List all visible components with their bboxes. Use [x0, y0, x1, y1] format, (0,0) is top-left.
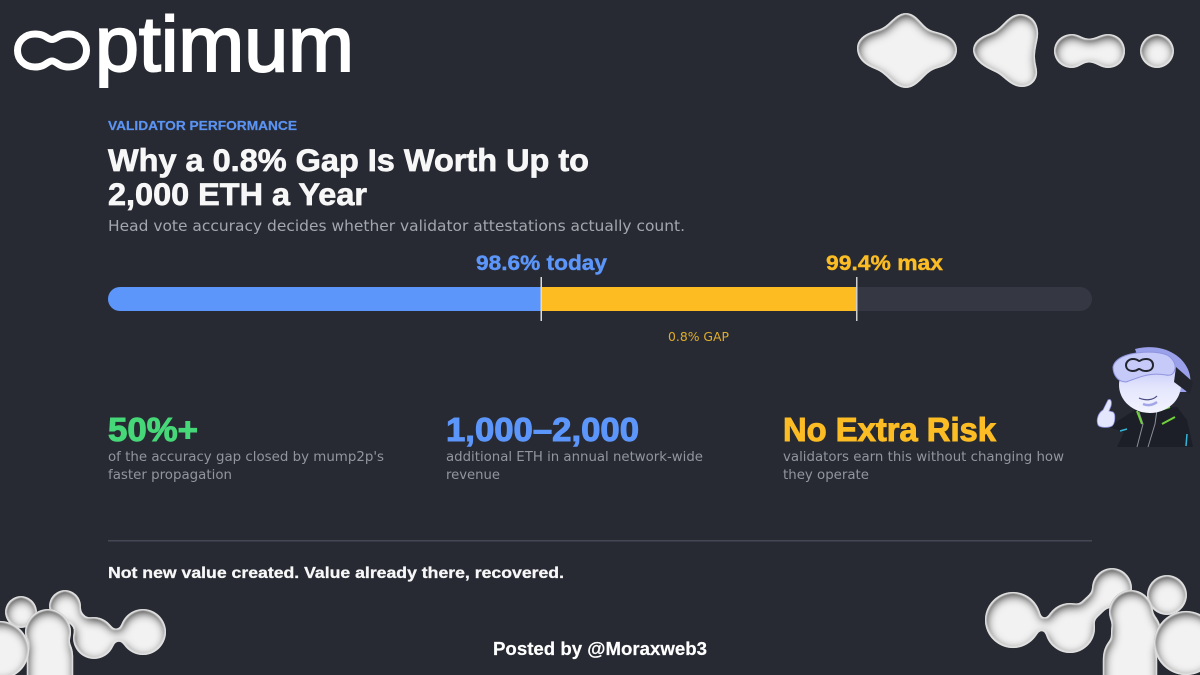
- stat: no extra risk: No Extra Risk: [783, 411, 997, 448]
- title: [108, 142, 589, 212]
- icon: mascot with VR headset and thumbs up: [1097, 347, 1193, 447]
- stat: no extra risk: validators earn this without changing how: [783, 450, 1064, 465]
- bar segment: gap: [541, 287, 857, 311]
- footer credit: Posted by @Moraxweb3: [493, 639, 707, 659]
- stat: 1,000-2,000 ETH: revenue: [446, 468, 500, 483]
- label: 98.6% today: 98.6% today: [476, 252, 607, 275]
- mascot back of head: [1135, 347, 1190, 392]
- logo: optimum: [18, 0, 354, 88]
- decoration: chrome blobs bottom right: [985, 568, 1200, 675]
- takeaway text: Not new value created. Value already there, recovered.: [108, 565, 564, 582]
- mascot thumbs up hand: [1097, 399, 1115, 427]
- mascot face: [1119, 357, 1181, 413]
- label: gap: 0.8% GAP: [668, 330, 729, 344]
- mascot headset strap: [1174, 367, 1193, 394]
- stat: 1,000-2,000 ETH: 1,000–2,000: [446, 411, 639, 448]
- divider: [108, 540, 1092, 542]
- stat: 50%+: 50%+: [108, 411, 198, 448]
- subtitle: Head vote accuracy decides whether validator attestations actually count.: [108, 217, 685, 235]
- stat: 50%+: [108, 411, 384, 483]
- stat: 1,000-2,000 ETH: additional ETH in annual network-wide: [446, 450, 703, 465]
- bar segment: today: [108, 287, 541, 311]
- chart: accuracy progress bar: [108, 252, 1092, 344]
- icon: logo loop: [18, 34, 86, 67]
- stat: no extra risk: [783, 411, 1064, 483]
- decoration: chrome blobs bottom left: [0, 590, 166, 675]
- eyebrow: validator performance: VALIDATOR PERFORMANCE: [108, 118, 297, 133]
- label: 99.4% max: 99.4% max: [826, 252, 943, 275]
- stat: no extra risk: they operate: [783, 468, 869, 483]
- marker: today: [540, 277, 542, 321]
- mascot jacket: [1108, 407, 1193, 447]
- bar track: [108, 287, 1092, 311]
- stat: 50%+: of the accuracy gap closed by mump2p's: [108, 450, 384, 465]
- decoration: chrome blobs top right: [857, 13, 1174, 88]
- logo wordmark: ptimum: [95, 0, 354, 88]
- marker: max: [856, 277, 858, 321]
- stat: 50%+: faster propagation: [108, 468, 232, 483]
- mascot headset visor: [1113, 352, 1175, 382]
- stat: 1,000-2,000 ETH: [446, 411, 703, 483]
- title: Why a 0.8% Gap Is Worth Up to: [108, 142, 589, 178]
- title: 2,000 ETH a Year: [108, 176, 367, 212]
